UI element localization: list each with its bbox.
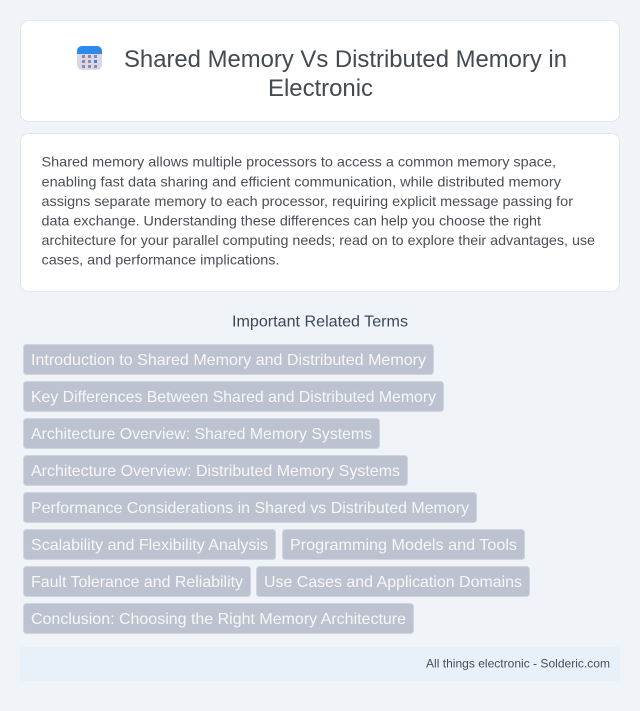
term tag 5: Performance Considerations in Shared vs Distributed Memory	[31, 500, 469, 517]
intro text block: Shared memory allows multiple processors to access a common memory space,	[42, 154, 556, 170]
term tag 10: Conclusion: Choosing the Right Memory Architecture	[31, 611, 406, 628]
intro text block	[42, 154, 595, 268]
header panel	[20, 20, 620, 122]
heading: important related terms: Important Related Terms	[232, 314, 408, 330]
title	[124, 46, 567, 102]
term tag 6: Scalability and Flexibility Analysis	[31, 537, 268, 554]
term tag 3: Architecture Overview: Shared Memory Systems	[31, 426, 372, 443]
intro text block: cases, and performance implications.	[42, 252, 280, 268]
term tag 8: Fault Tolerance and Reliability	[31, 574, 243, 591]
term tag 5	[24, 492, 476, 522]
icon: calendar grid	[77, 46, 102, 70]
footer	[20, 647, 620, 681]
term tag 10	[24, 604, 414, 634]
title: Shared Memory Vs Distributed Memory in	[124, 46, 567, 73]
term tag 4: Architecture Overview: Distributed Memory Systems	[31, 463, 400, 480]
term tag 7: Programming Models and Tools	[290, 537, 517, 554]
term tag 4	[24, 456, 408, 486]
term tag 3	[24, 418, 380, 448]
terms list	[24, 344, 530, 634]
term tag 1	[24, 344, 434, 374]
title: Electronic	[268, 75, 373, 102]
intro text block: data exchange. Understanding these differences can help you choose the right	[42, 212, 541, 228]
footer: All things electronic - Solderic.com	[426, 656, 610, 670]
term tag 6	[24, 530, 276, 560]
term tag 8	[24, 566, 250, 596]
term tag 7	[282, 530, 524, 560]
term tag 2: Key Differences Between Shared and Distributed Memory	[31, 389, 436, 406]
term tag 2	[24, 382, 444, 412]
term tag 1: Introduction to Shared Memory and Distributed Memory	[31, 352, 426, 369]
intro text block: enabling fast data sharing and efficient communication, while distributed memory	[42, 174, 561, 190]
panel: intro description	[20, 134, 620, 292]
term tag 9	[256, 566, 530, 596]
term tag 9: Use Cases and Application Domains	[264, 574, 522, 591]
intro text block: assigns separate memory to each processor, requiring explicit message passing for	[42, 193, 573, 209]
intro text block: architecture for your parallel computing needs; read on to explore their advantages, use	[42, 232, 595, 248]
